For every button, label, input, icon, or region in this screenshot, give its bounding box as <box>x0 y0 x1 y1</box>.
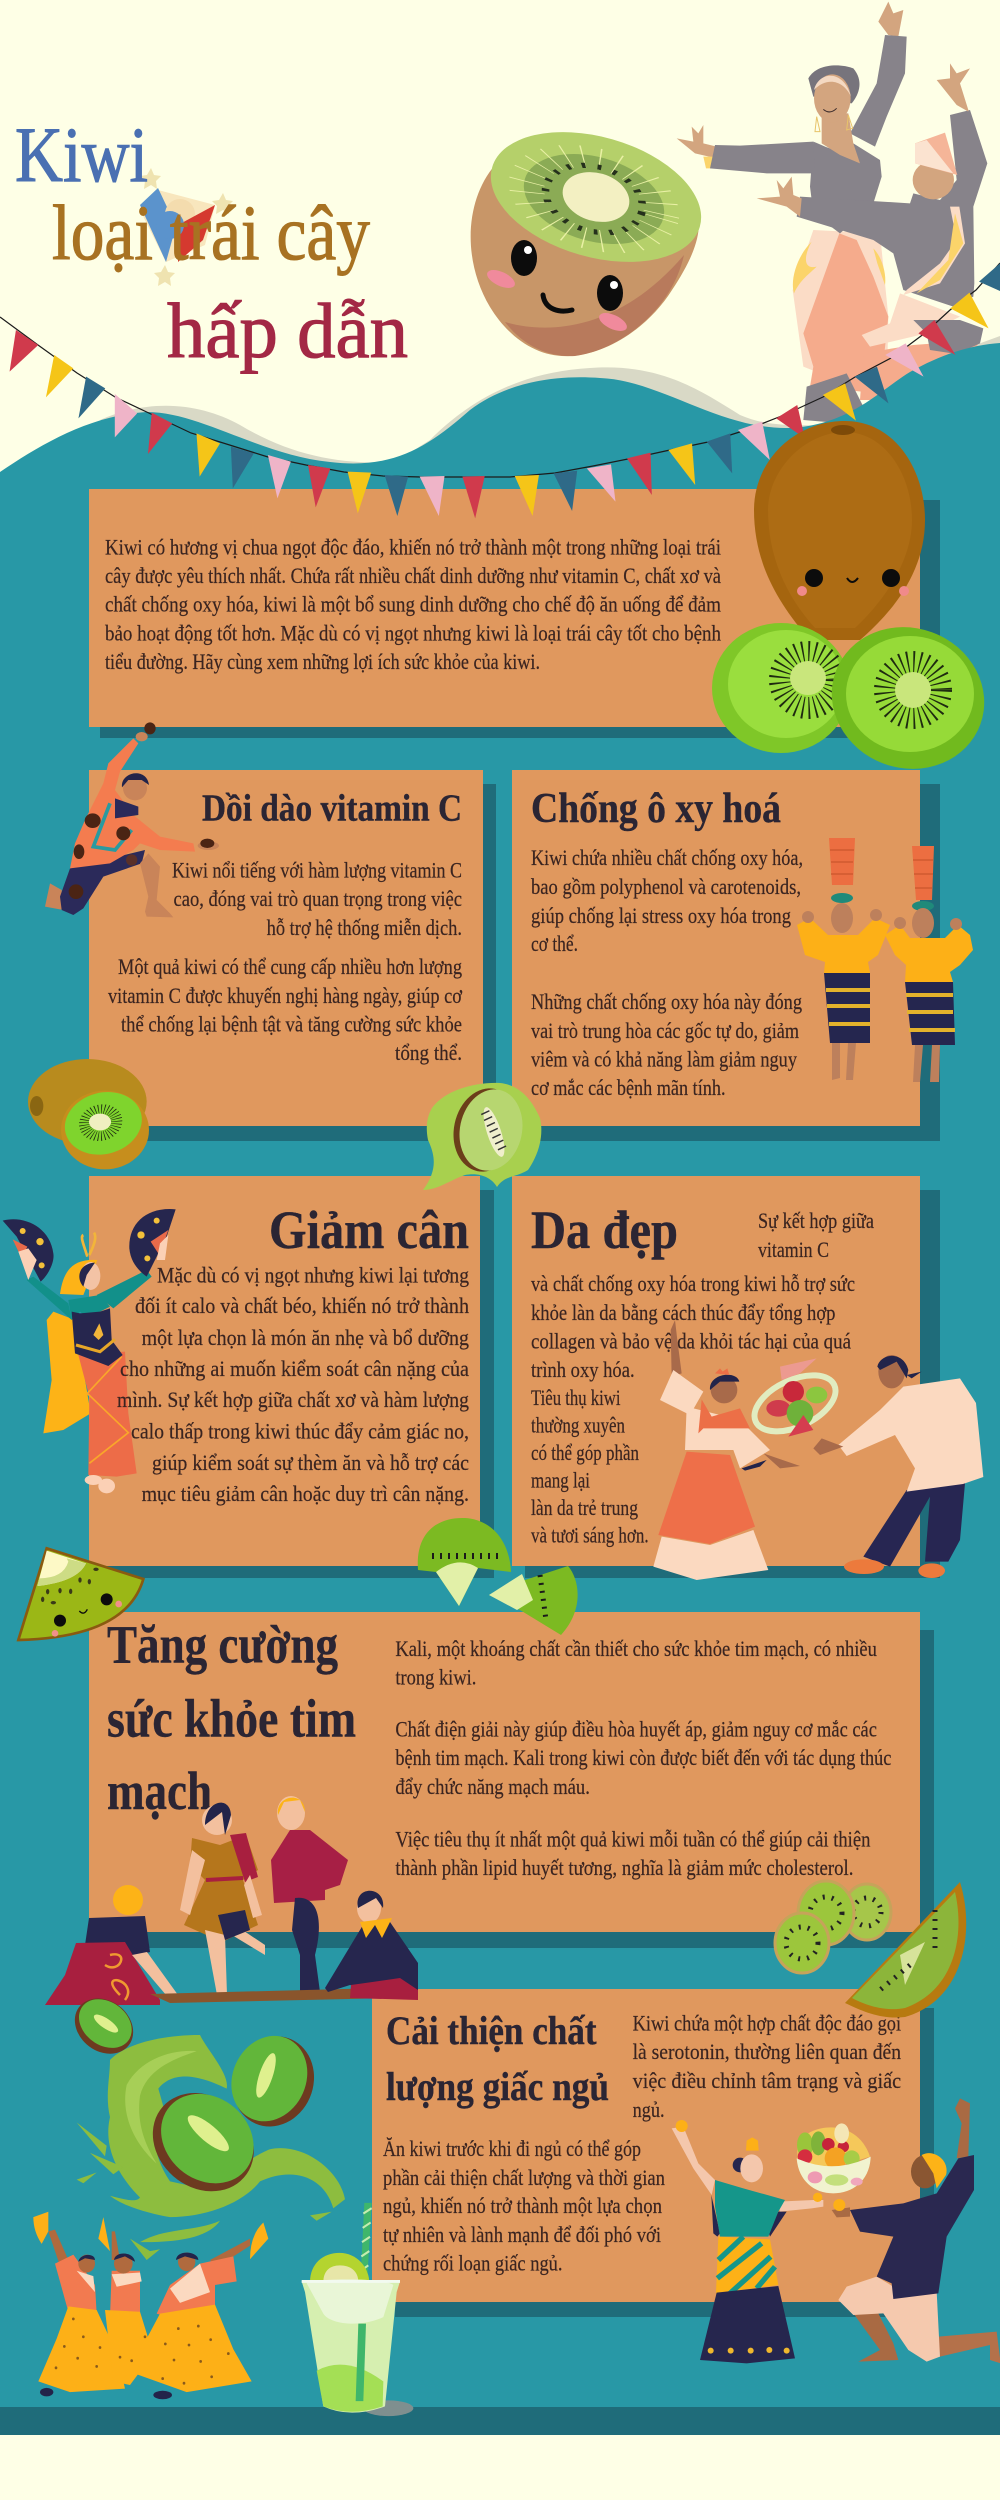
antioxidants text: bao gồm polyphenol và carotenoids, <box>531 874 801 899</box>
skin text: và chất chống oxy hóa trong kiwi hỗ trợ sức <box>531 1271 855 1296</box>
title: loại trái cây <box>52 189 370 276</box>
weight loss text: Mặc dù có vị ngọt nhưng kiwi lại tương <box>157 1263 469 1288</box>
sleep text left: chứng rối loạn giấc ngủ. <box>383 2251 562 2276</box>
heading: antioxidants: Chống ô xy hoá <box>531 786 781 832</box>
heading: heart health <box>107 1615 356 1821</box>
intro text: chất chống oxy hóa, kiwi là một bổ sung dinh dưỡng cho chế độ ăn uống để đảm <box>105 592 721 617</box>
weight loss text: calo thấp trong kiwi thúc đẩy cảm giác no, <box>131 1419 469 1444</box>
icon: fruit bowl <box>797 2123 871 2193</box>
background hill: beige <box>100 336 1000 480</box>
skin text: thường xuyên <box>531 1413 625 1438</box>
weight loss text: cho những ai muốn kiểm soát cân nặng của <box>120 1356 469 1381</box>
sleep text right: ngủ. <box>633 2097 665 2122</box>
illustration: two women with baskets <box>797 838 973 1082</box>
heading: vitamin C: Dồi dào vitamin C <box>202 788 462 830</box>
sleep text right: là serotonin, thường liên quan đến <box>633 2039 901 2064</box>
vitamin C text <box>108 858 462 1065</box>
illustration: kiwi drink <box>302 2203 413 2416</box>
skin text: và tươi sáng hơn. <box>531 1523 649 1548</box>
antioxidants text <box>531 845 803 1100</box>
weight loss text: một lựa chọn là món ăn nhẹ và bổ dưỡng <box>142 1325 469 1350</box>
title <box>15 111 408 374</box>
title: hấp dẫn <box>167 287 408 374</box>
vitamin C text: Một quả kiwi có thể cung cấp nhiều hơn lượng <box>118 954 462 979</box>
illustration: couple with fruit <box>653 1320 983 1580</box>
panel: heart health <box>89 1612 934 1948</box>
sleep text right: việc điều chỉnh tâm trạng và giấc <box>633 2068 901 2093</box>
heading: beautiful skin: Da đẹp <box>531 1200 678 1260</box>
vitamin C text: Kiwi nổi tiếng với hàm lượng vitamin C <box>172 858 462 883</box>
weight loss text <box>117 1263 469 1506</box>
heading: sleep <box>386 2008 609 2109</box>
bunting string and flags <box>0 263 1000 518</box>
illustration: kiwi mascot <box>471 110 716 356</box>
sleep text left <box>383 2136 665 2276</box>
intro text: tiểu đường. Hãy cùng xem những lợi ích sức khỏe của kiwi. <box>105 649 540 674</box>
vitamin C text: hỗ trợ hệ thống miễn dịch. <box>267 915 462 940</box>
illustration: woman with fans <box>3 1209 176 1493</box>
heading: sleep: lượng giấc ngủ <box>386 2064 609 2109</box>
antioxidants text: Những chất chống oxy hóa này đóng <box>531 989 802 1014</box>
antioxidants text: viêm và có khả năng làm giảm nguy <box>531 1046 797 1072</box>
panel: antioxidants <box>512 770 940 1141</box>
intro text: Kiwi có hương vị chua ngọt độc đáo, khiến nó trở thành một trong những loại trái <box>105 534 721 560</box>
heart health text: bệnh tim mạch. Kali trong kiwi còn được biết đến với tác dụng thúc <box>395 1745 892 1770</box>
illustration: kiwi slices and wedge, right <box>775 1881 966 2018</box>
weight loss text: giúp kiểm soát sự thèm ăn và hỗ trợ các <box>152 1450 469 1475</box>
illustration: whole kiwi with face and two slices <box>712 421 1000 790</box>
heading: heart health: sức khỏe tim <box>107 1689 356 1749</box>
sleep text left: tự nhiên và lành mạnh để đối phó với <box>383 2222 661 2247</box>
skin text: trình oxy hóa. <box>531 1357 635 1382</box>
illustration: three dancers in yellow skirts <box>33 2212 268 2399</box>
illustration: kiwi splash <box>65 1987 345 2260</box>
vitamin C text: cao, đóng vai trò quan trọng trong việc <box>174 886 462 911</box>
illustration: kiwi wedges, centre <box>418 1518 578 1635</box>
panel: sleep <box>372 1989 934 2317</box>
illustration: dancing group <box>45 1796 418 2005</box>
heart health text: thành phần lipid huyết tương, nghĩa là giảm mức cholesterol. <box>395 1855 853 1880</box>
heart health text: Chất điện giải này giúp điều hòa huyết áp, giảm nguy cơ mắc các <box>395 1717 877 1742</box>
weight loss text: mục tiêu giảm cân hoặc duy trì cân nặng. <box>142 1481 469 1506</box>
heart health text: đẩy chức năng mạch máu. <box>395 1774 590 1799</box>
panel: vitamin C <box>89 770 496 1141</box>
illustration: kiwi wedge mascot <box>18 1548 143 1640</box>
heading: sleep: Cải thiện chất <box>386 2008 597 2053</box>
vitamin C text: tổng thể. <box>395 1040 462 1065</box>
skin text: collagen và bảo vệ da khỏi tác hại của quá <box>531 1329 851 1354</box>
panel: weight loss <box>3 1176 494 1578</box>
skin text: mang lại <box>531 1468 590 1493</box>
weight loss text: mình. Sự kết hợp giữa chất xơ và hàm lượng <box>117 1387 469 1412</box>
heart health text <box>395 1636 892 1880</box>
heart health text: Việc tiêu thụ ít nhất một quả kiwi mỗi tuần có thể giúp cải thiện <box>395 1827 870 1852</box>
sleep text left: phần cải thiện chất lượng và thời gian <box>383 2165 665 2190</box>
heading: heart health: Tăng cường <box>107 1615 338 1675</box>
illustration: man with kiwis <box>45 722 219 917</box>
panel: intro <box>89 489 940 738</box>
heading: weight loss: Giảm cân <box>269 1200 469 1260</box>
intro text <box>105 534 721 674</box>
sleep text left: Ăn kiwi trước khi đi ngủ có thể góp <box>383 2136 641 2161</box>
intro text: bảo hoạt động tốt hơn. Mặc dù có vị ngọt nhưng kiwi là loại trái cây tốt cho bệnh <box>105 621 721 646</box>
illustration: kiwi whole and half, left <box>28 1059 149 1169</box>
vitamin C text: vitamin C được khuyến nghị hàng ngày, giúp cơ <box>108 983 462 1008</box>
antioxidants text: giúp chống lại stress oxy hóa trong <box>531 903 791 928</box>
antioxidants text: cơ mắc các bệnh mãn tính. <box>531 1075 726 1100</box>
antioxidants text: cơ thể. <box>531 931 578 956</box>
title: Kiwi <box>15 111 148 198</box>
skin text: Tiêu thụ kiwi <box>531 1385 620 1410</box>
antioxidants text: vai trò trung hòa các gốc tự do, giảm <box>531 1018 799 1043</box>
weight loss text: đối ít calo và chất béo, khiến nó trở thành <box>135 1293 469 1318</box>
icon: fruit splash <box>746 1358 844 1443</box>
sleep text right: Kiwi chứa một hợp chất độc đáo gọi <box>633 2011 901 2036</box>
bottom dark band <box>0 2407 1000 2435</box>
flag sun emblem <box>140 168 233 286</box>
sleep text left: ngủ, khiến nó trở thành một lựa chọn <box>383 2193 662 2218</box>
skin text: Sự kết hợp giữa <box>758 1208 874 1233</box>
antioxidants text: Kiwi chứa nhiều chất chống oxy hóa, <box>531 845 803 870</box>
heart health text: trong kiwi. <box>395 1665 476 1690</box>
vitamin C text: thể chống lại bệnh tật và tăng cường sức khỏe <box>121 1012 462 1037</box>
skin text: khỏe làn da bằng cách thúc đẩy tổng hợp <box>531 1300 836 1325</box>
skin text: làn da trẻ trung <box>531 1495 638 1520</box>
skin text: có thể góp phần <box>531 1440 639 1465</box>
sleep text right <box>633 2011 901 2122</box>
skin text <box>531 1208 874 1548</box>
illustration: kiwi juice splash, centre <box>423 1082 541 1190</box>
skin text: vitamin C <box>758 1237 829 1262</box>
illustration: top dancers <box>677 2 987 423</box>
panel: beautiful skin <box>512 1176 940 1578</box>
illustration: couple with fruit bowl <box>672 2098 1000 2363</box>
heading: heart health: mạch <box>107 1761 212 1821</box>
heart health text: Kali, một khoáng chất cần thiết cho sức khỏe tim mạch, có nhiều <box>395 1636 877 1661</box>
intro text: cây được yêu thích nhất. Chứa rất nhiều chất dinh dưỡng như vitamin C, chất xơ và <box>105 563 721 588</box>
